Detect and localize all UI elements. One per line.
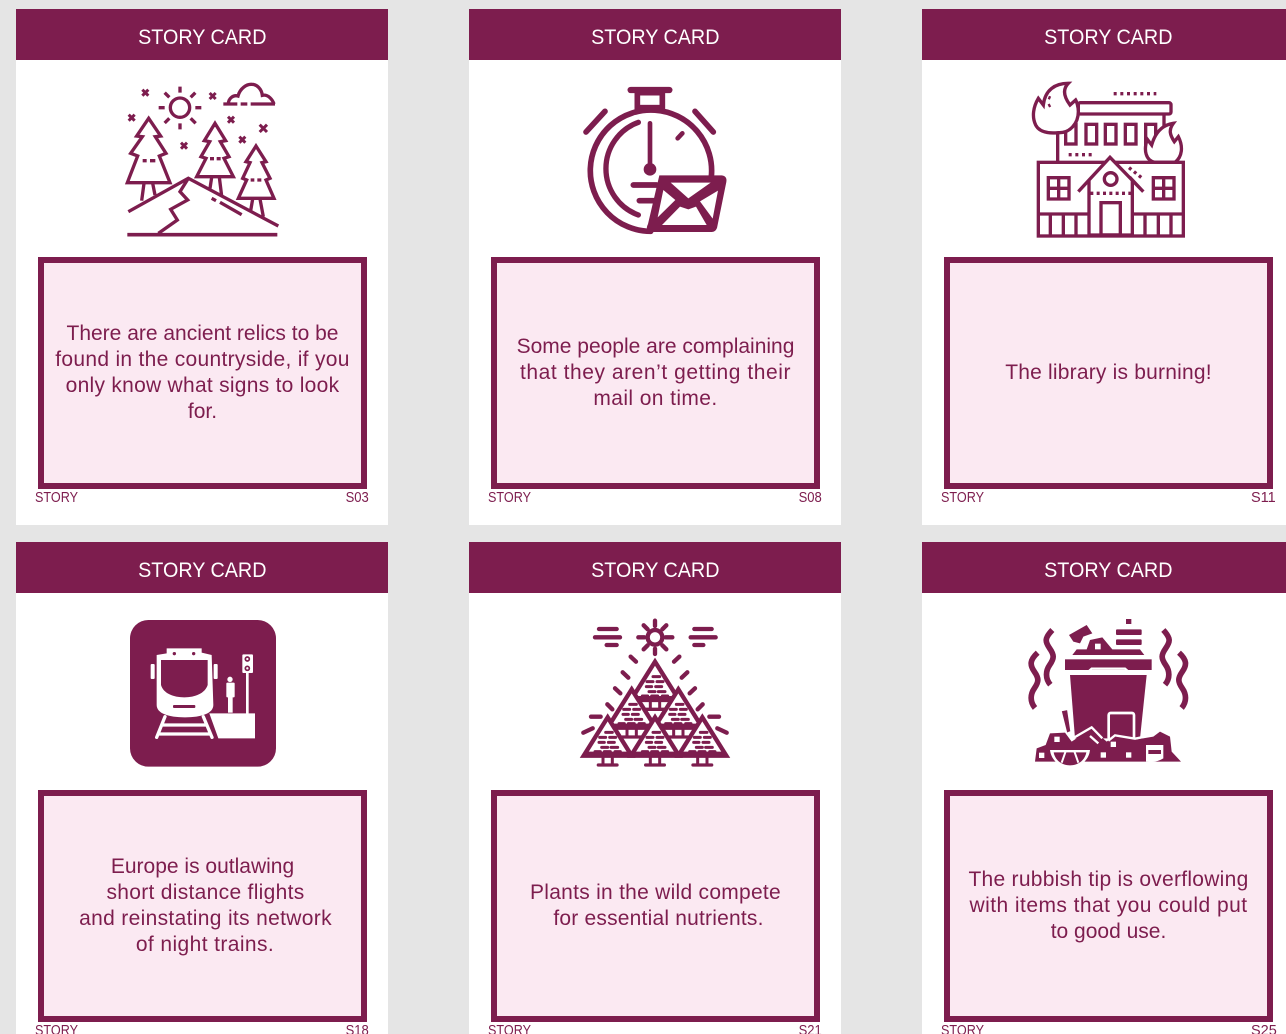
- card header: [16, 542, 388, 593]
- card header: STORY CARD: [591, 26, 719, 49]
- icon: overflowing rubbish bin: [1028, 619, 1188, 766]
- card code: S08: [799, 490, 822, 506]
- story text panel: only know what signs to look: [66, 374, 339, 397]
- card header: [922, 9, 1286, 60]
- panel: story card S11: [922, 9, 1286, 525]
- story text panel: The rubbish tip is overflowing: [968, 868, 1249, 891]
- story text panel: with items that you could put: [969, 894, 1248, 917]
- icon: burning library: [1032, 82, 1185, 238]
- card header: [922, 542, 1286, 593]
- card code: S11: [1251, 490, 1276, 506]
- story text panel: to good use.: [1051, 920, 1166, 943]
- card header: STORY CARD: [138, 26, 266, 49]
- story text panel: found in the countryside, if you: [55, 348, 350, 371]
- story text panel: mail on time.: [593, 387, 718, 410]
- story text panel: short distance flights: [106, 881, 305, 904]
- icon: train at platform: [130, 620, 276, 767]
- card header: [16, 9, 388, 60]
- card header: [469, 9, 841, 60]
- story text panel: for.: [188, 400, 217, 423]
- icon: stopwatch with envelope: [583, 86, 726, 234]
- footer label: STORY: [35, 490, 78, 506]
- story text panel: [491, 790, 820, 1022]
- story text panel: for essential nutrients.: [553, 907, 764, 930]
- story text panel: [944, 257, 1273, 489]
- footer label: STORY: [488, 490, 531, 506]
- card header: STORY CARD: [1044, 26, 1172, 49]
- story text panel: of night trains.: [136, 933, 274, 956]
- panel: story card S08: [469, 9, 841, 525]
- panel: story card S18: [16, 542, 388, 1034]
- story text panel: [944, 790, 1273, 1022]
- story text panel: that they aren’t getting their: [520, 361, 791, 384]
- card header: STORY CARD: [591, 559, 719, 582]
- story text panel: [491, 257, 820, 489]
- panel: story card S03: [16, 9, 388, 525]
- footer label: STORY: [941, 490, 984, 506]
- card header: STORY CARD: [138, 559, 266, 582]
- card header: [469, 542, 841, 593]
- story text panel: [38, 790, 367, 1022]
- story text panel: The library is burning!: [1005, 361, 1212, 384]
- icon: forest with mountain and sun: [124, 82, 280, 236]
- icon: pyramid of trees under sun: [580, 618, 730, 767]
- story text panel: Europe is outlawing: [111, 855, 294, 878]
- story text panel: and reinstating its network: [79, 907, 332, 930]
- card header: STORY CARD: [1044, 559, 1172, 582]
- story text panel: There are ancient relics to be: [66, 322, 338, 345]
- card code: S03: [346, 490, 369, 506]
- story text panel: [38, 257, 367, 489]
- story text panel: Some people are complaining: [517, 335, 794, 358]
- story text panel: Plants in the wild compete: [530, 881, 781, 904]
- panel: story card S21: [469, 542, 841, 1034]
- panel: story card S25: [922, 542, 1286, 1034]
